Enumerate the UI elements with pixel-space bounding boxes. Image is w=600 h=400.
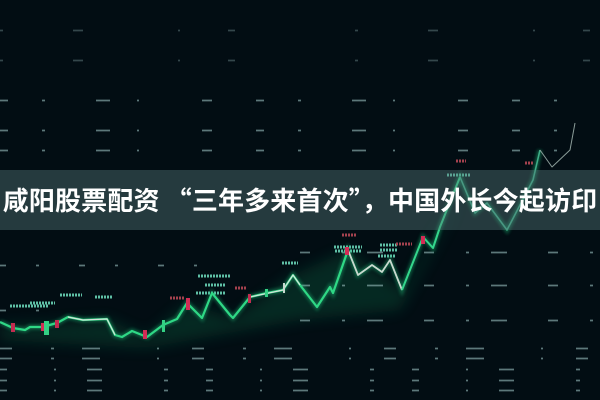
main price line glow — [0, 150, 540, 337]
green glow under the chart line — [0, 200, 460, 348]
title: 咸阳股票配资 “三年多来首次”，中国外长今起访印 — [3, 181, 597, 218]
floating chart labels — [10, 161, 533, 306]
main price line — [0, 123, 575, 337]
title band — [0, 170, 600, 230]
candlesticks — [11, 236, 425, 339]
